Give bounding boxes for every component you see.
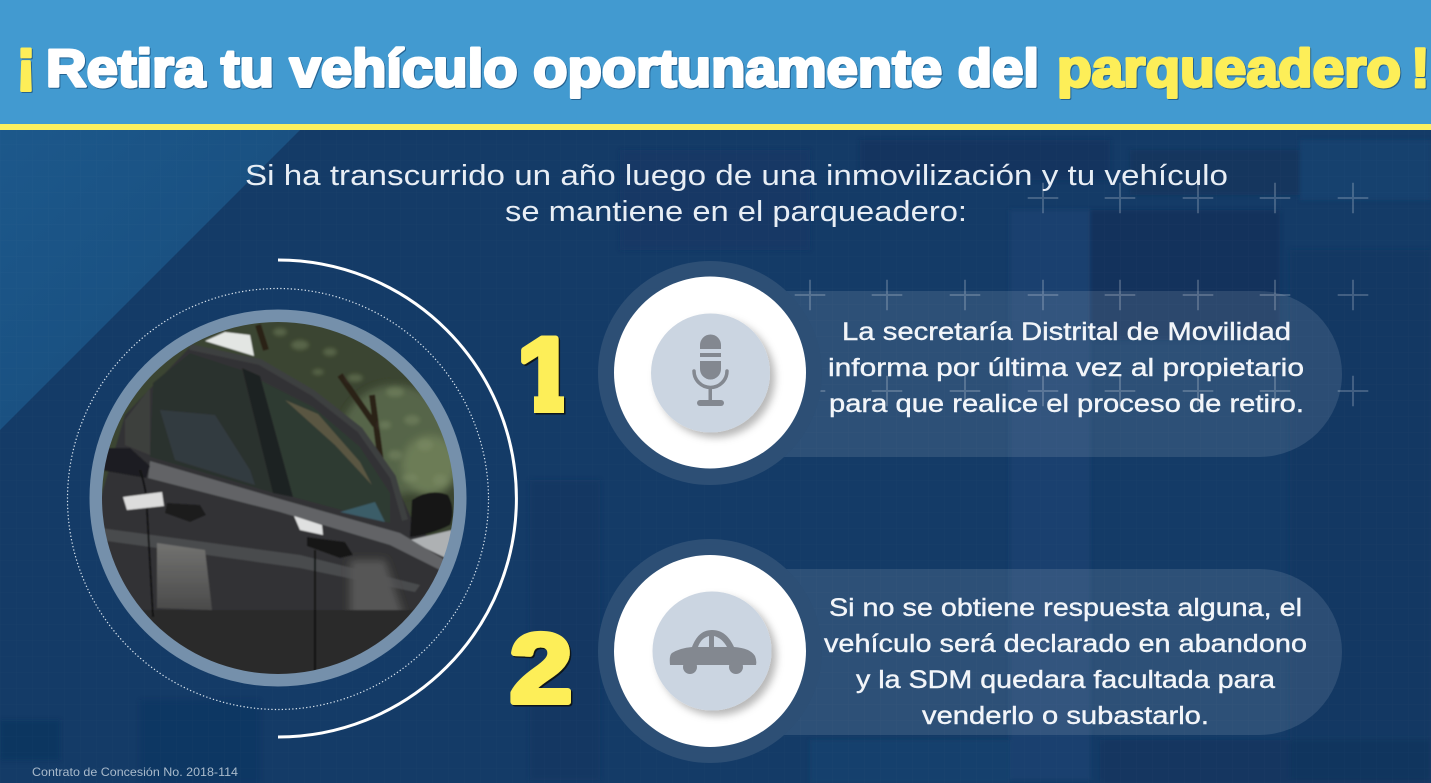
handles [165, 503, 206, 522]
step 1 white disc [614, 276, 806, 468]
notices [123, 492, 164, 510]
step 2 text: vehículo será declarado en abandono [824, 630, 1307, 658]
step 1 grey disc [651, 314, 770, 432]
step 2 number: 2 [510, 614, 572, 723]
footer contract note: Contrato de Concesión No. 2018-114 [32, 765, 238, 779]
title: Retira tu vehículo oportunamente del [46, 40, 1039, 98]
step 2 pill [700, 569, 1342, 735]
photo tree background [102, 322, 454, 536]
panel: step 2 [510, 539, 1342, 763]
rear window [153, 376, 162, 386]
photo: parked dark car with notices [100, 320, 460, 690]
step 1 number: 1 [517, 317, 575, 433]
belt moulding [148, 461, 445, 570]
step 2 halo [598, 539, 822, 763]
icon: car [670, 630, 756, 674]
step 1 text [828, 318, 1304, 418]
title: ! [1411, 36, 1430, 99]
step 2 text [824, 594, 1307, 730]
step 2 text: venderlo o subastarlo. [922, 702, 1209, 730]
step 2 white disc [614, 555, 806, 747]
step 1 text: informa por última vez al propietario [828, 354, 1304, 382]
photo ring [96, 316, 460, 680]
step 2 grey disc [652, 592, 772, 710]
intro text: se mantiene en el parqueadero: [505, 196, 967, 228]
roof edge [190, 347, 405, 520]
panel: step 1 [517, 261, 1342, 485]
white outer arc [278, 260, 516, 737]
rear quarter glass [125, 388, 150, 455]
intro text [245, 160, 1228, 228]
front window [260, 380, 390, 523]
title: parqueadero [1057, 40, 1401, 98]
photo car body [102, 348, 444, 611]
step 2 text: Si no se obtiene respuesta alguna, el [829, 594, 1302, 622]
title [16, 27, 1430, 99]
intro text: Si ha transcurrido un año luego de una inmovilización y tu vehículo [245, 160, 1228, 192]
reflections [157, 543, 212, 610]
step 1 halo [598, 261, 822, 485]
pillar [242, 368, 293, 497]
step 2 text: y la SDM quedara facultada para [856, 666, 1275, 694]
step 1 pill [700, 291, 1342, 457]
door seams [140, 470, 315, 672]
title: ¡ [16, 27, 36, 94]
dotted ring [68, 288, 488, 710]
step 1 text: para que realice el proceso de retiro. [829, 390, 1304, 418]
header band [0, 0, 1431, 130]
icon: microphone [694, 334, 727, 406]
step 1 text: La secretaría Distrital de Movilidad [842, 318, 1291, 346]
mirror [410, 492, 453, 537]
